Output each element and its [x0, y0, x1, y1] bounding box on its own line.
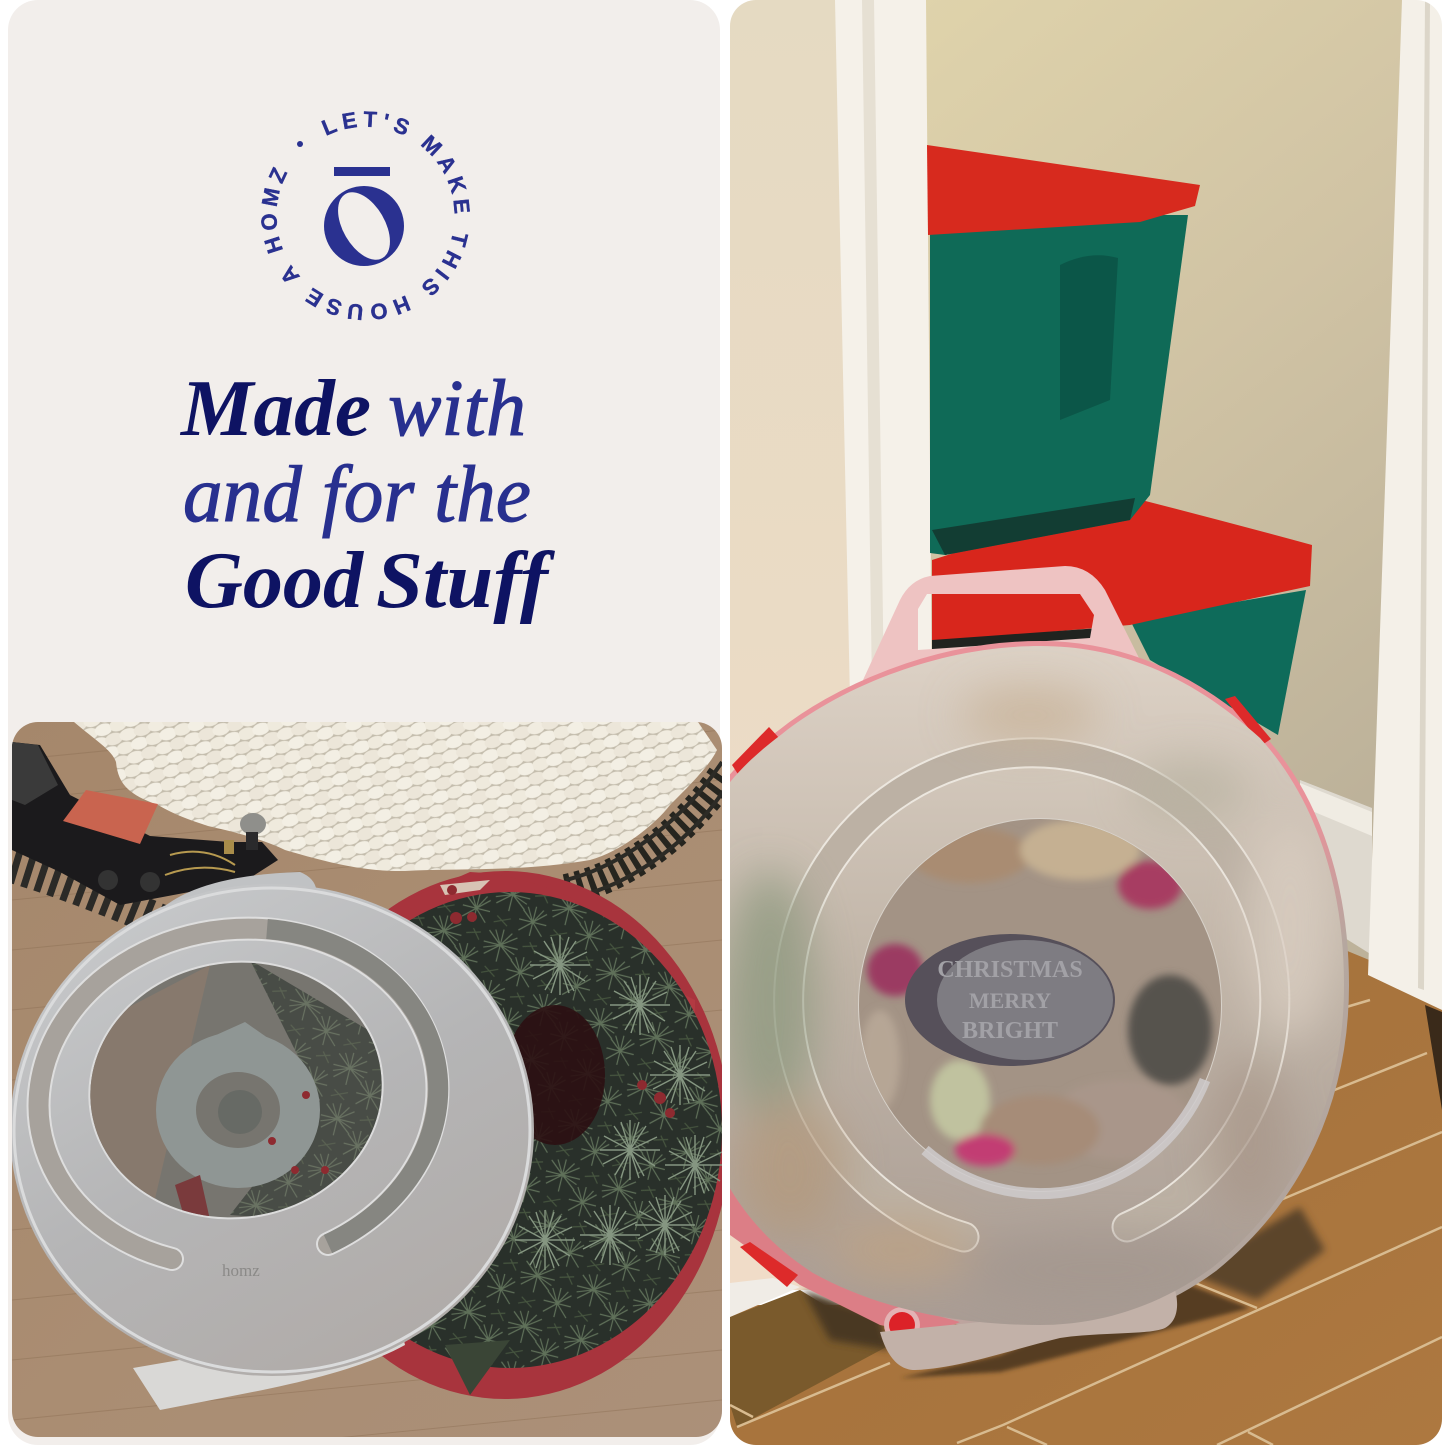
photo: wreath box leaning in hallway	[702, 0, 1442, 1445]
logo o mark	[324, 183, 404, 269]
right door frame	[1368, 0, 1442, 1110]
lid spiral channel	[39, 929, 437, 1259]
bottom lid tab	[133, 1342, 405, 1410]
circular slogan text: LET'S MAKE THIS HOUSE A HOMZ	[261, 111, 470, 320]
wood floor	[12, 690, 722, 1445]
christmas plaque: CHRISTMAS	[937, 957, 1083, 983]
headline: with	[388, 365, 526, 453]
panel: beige left background	[8, 0, 720, 1445]
toy train	[12, 742, 278, 905]
pink rim	[702, 646, 1344, 1325]
floor	[730, 950, 1442, 1445]
wreath greenery	[409, 892, 722, 1395]
clear lid	[10, 884, 534, 1376]
headline: Made	[179, 365, 371, 453]
etched wreath	[176, 1022, 300, 1168]
headline	[179, 365, 556, 625]
upper red lid	[927, 145, 1200, 235]
upper green bin	[930, 215, 1188, 555]
berries	[447, 885, 675, 1118]
left train track	[12, 866, 170, 925]
pink handle	[863, 566, 1150, 680]
left wall	[730, 0, 855, 1290]
homz label: homz	[222, 1261, 260, 1280]
frosted lid	[702, 646, 1344, 1325]
christmas plaque	[905, 934, 1115, 1066]
red peg	[884, 1308, 920, 1332]
back wall	[920, 0, 1410, 1000]
lid window	[88, 960, 384, 1220]
top lid tab	[166, 872, 316, 906]
left baseboard	[730, 1278, 800, 1317]
bottom tab	[880, 1291, 1178, 1370]
lower red lid	[932, 497, 1312, 650]
red wreath tray	[382, 871, 722, 1399]
christmas plaque: MERRY	[969, 988, 1051, 1013]
baseboard	[1300, 780, 1372, 955]
red clips	[732, 696, 1271, 1287]
headline: Good	[185, 537, 364, 625]
window bottom bevel	[925, 1080, 1205, 1194]
headline: and for the	[183, 451, 531, 539]
lower left rim band	[730, 1185, 960, 1335]
knit rug	[74, 722, 717, 871]
lower storage bin	[1130, 590, 1306, 735]
left door frame	[835, 0, 932, 700]
headline: Stuff	[376, 537, 556, 625]
blurred contents	[725, 687, 1335, 1305]
logo: circular badge	[261, 111, 470, 320]
right train track	[566, 762, 728, 898]
lid window	[858, 818, 1222, 1150]
christmas plaque: BRIGHT	[962, 1018, 1058, 1044]
logo dot	[297, 141, 303, 147]
logo bar	[334, 167, 390, 176]
photo: wreath box on wood floor with train	[10, 690, 730, 1445]
lid channel	[789, 753, 1275, 1237]
